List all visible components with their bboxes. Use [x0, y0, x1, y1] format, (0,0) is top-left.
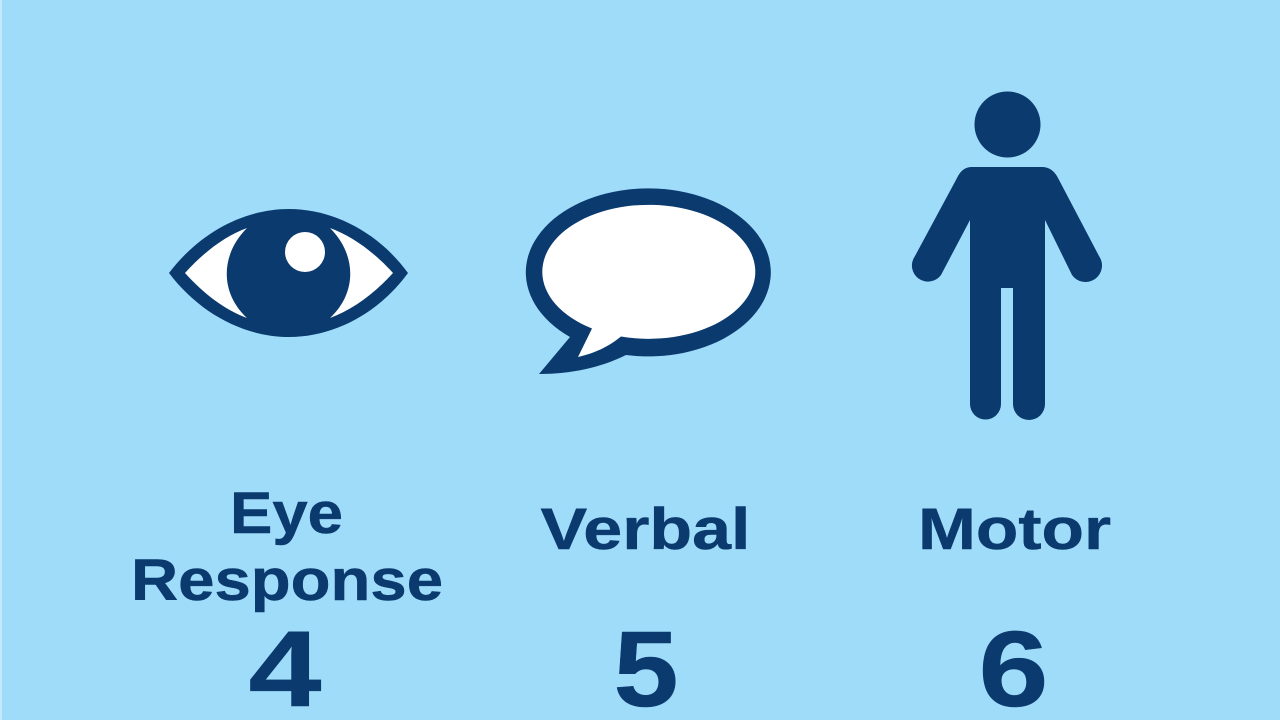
icon: speech bubble: [526, 188, 771, 374]
heading: eye response: Eye: [230, 481, 343, 546]
heading: verbal: Verbal: [540, 497, 750, 562]
icon: person: [912, 92, 1102, 420]
heading: eye response: [131, 481, 443, 613]
icon: eye: [169, 209, 408, 337]
heading: eye response: Response: [131, 548, 443, 613]
heading: motor: Motor: [918, 497, 1111, 562]
